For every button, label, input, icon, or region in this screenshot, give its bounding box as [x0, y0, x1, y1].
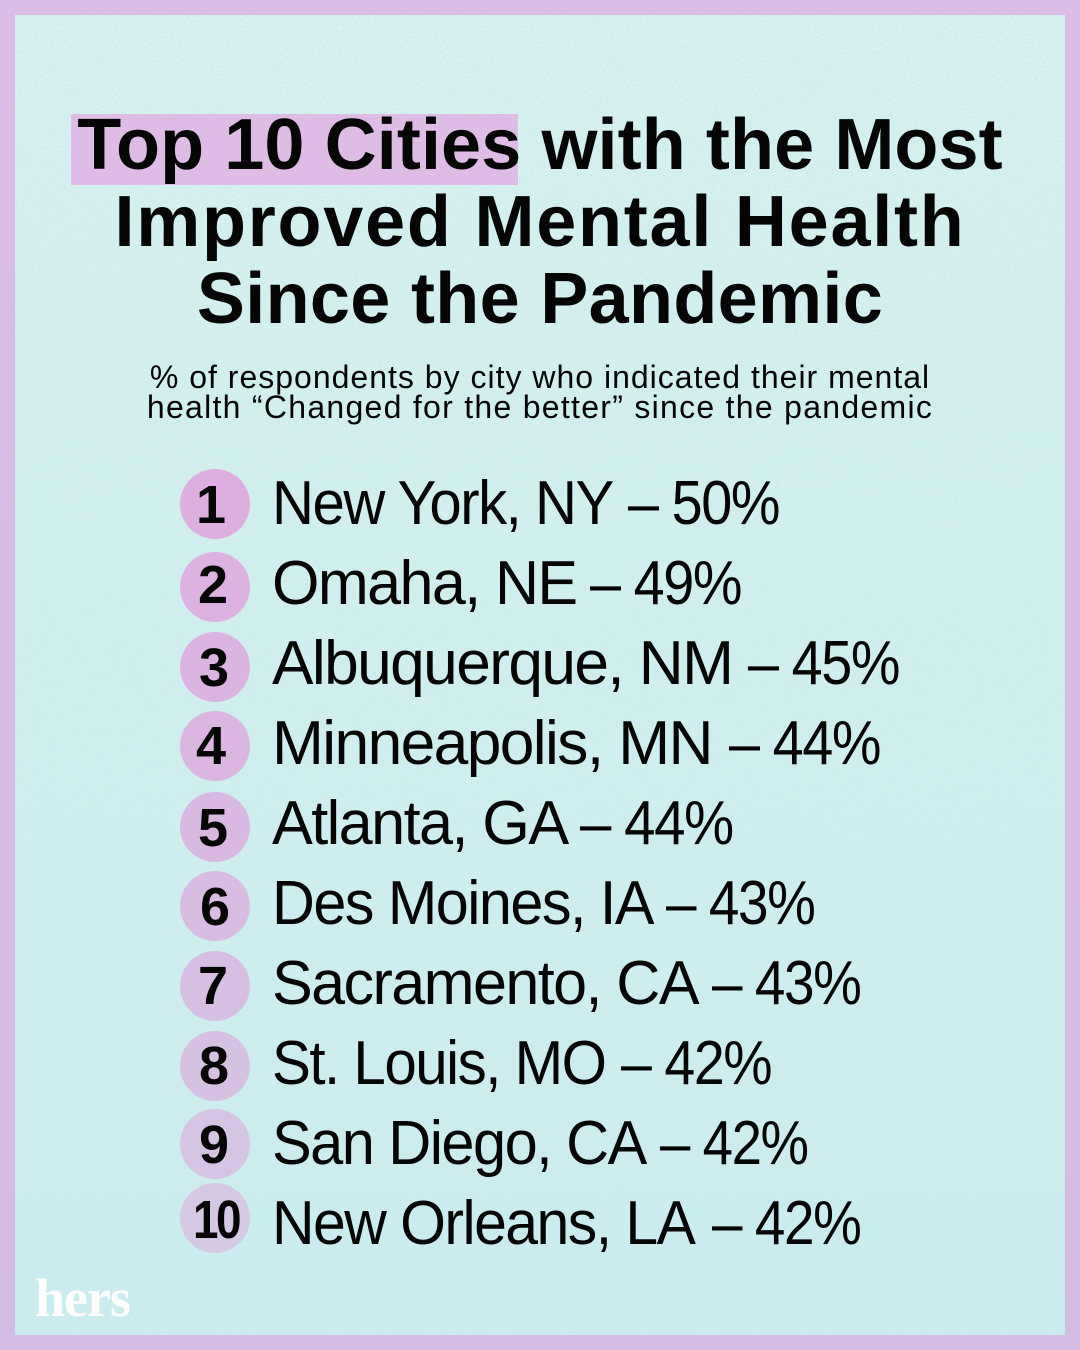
- city 1: New York, NY: [272, 469, 613, 538]
- city 4: Minneapolis, MN: [272, 709, 712, 778]
- logo: hers: [35, 1268, 130, 1328]
- city 5: – 44%: [580, 789, 733, 858]
- city 5: [272, 789, 733, 858]
- city 2: Omaha, NE: [272, 549, 577, 618]
- city 10: – 42%: [712, 1189, 861, 1258]
- rank 9: [180, 1109, 250, 1179]
- rank 4: 4: [196, 716, 226, 776]
- city 2: [272, 549, 741, 618]
- city 1: – 50%: [628, 469, 779, 538]
- rank 6: [180, 871, 250, 941]
- city 9: San Diego, CA: [272, 1109, 646, 1178]
- city 9: [272, 1109, 808, 1178]
- subtitle: % of respondents by city who indicated their mental: [150, 359, 930, 395]
- city 3: Albuquerque, NM: [272, 629, 732, 698]
- title: Top 10 Cities with the Most: [77, 105, 1003, 185]
- rank 3: [180, 632, 250, 702]
- city 8: – 42%: [621, 1029, 771, 1098]
- rank 5: 5: [198, 798, 228, 858]
- city 6: – 43%: [666, 869, 815, 938]
- city 6: Des Moines, IA: [272, 869, 653, 938]
- title: [77, 105, 1003, 339]
- ranked list: [180, 469, 899, 1258]
- city 10: New Orleans, LA: [272, 1189, 694, 1258]
- rank 4: [180, 711, 250, 781]
- rank 1: [180, 469, 250, 539]
- rank 3: 3: [199, 638, 229, 698]
- title: Improved Mental Health: [114, 182, 966, 262]
- city 8: [272, 1029, 771, 1098]
- city 9: – 42%: [660, 1109, 808, 1178]
- rank 2: [180, 552, 250, 622]
- rank 1: 1: [196, 475, 226, 535]
- title: Since the Pandemic: [197, 259, 883, 339]
- rank 10: 10: [193, 1190, 239, 1250]
- city 1: [272, 469, 779, 538]
- rank 6: 6: [200, 877, 230, 937]
- city 4: – 44%: [729, 709, 880, 778]
- rank 9: 9: [199, 1115, 229, 1175]
- rank 5: [180, 792, 250, 862]
- rank 7: [180, 951, 250, 1021]
- city 3: – 45%: [748, 629, 899, 698]
- city 7: – 43%: [712, 949, 861, 1018]
- city 7: Sacramento, CA: [272, 949, 698, 1018]
- rank 10: [180, 1183, 250, 1253]
- rank 8: [180, 1031, 250, 1101]
- city 5: Atlanta, GA: [272, 789, 568, 858]
- subtitle: health “Changed for the better” since the pandemic: [147, 389, 933, 425]
- city 8: St. Louis, MO: [272, 1029, 605, 1098]
- subtitle: [147, 359, 933, 425]
- city 2: – 49%: [590, 549, 741, 618]
- rank 8: 8: [199, 1036, 229, 1096]
- rank 7: 7: [198, 956, 228, 1016]
- title highlight: [71, 114, 518, 185]
- rank 2: 2: [198, 555, 228, 615]
